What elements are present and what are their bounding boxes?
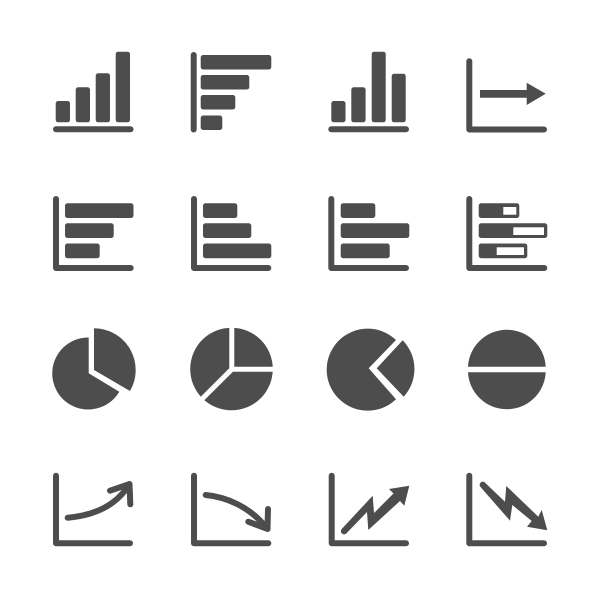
icon: falling zigzag arrow chart — [469, 476, 547, 543]
icon: horizontal bars, descending — [56, 199, 134, 268]
icon: pie chart three slices — [190, 325, 275, 410]
icon: pie chart with wedge — [327, 329, 414, 411]
icon: horizontal bars, ascending — [194, 199, 271, 268]
icon: ascending bar chart — [53, 52, 134, 132]
icon: descending horizontal bars — [191, 52, 271, 132]
icon: rising zigzag arrow chart — [332, 476, 409, 543]
icon: pie chart two halves — [468, 330, 546, 409]
icon: rising curve chart — [56, 476, 130, 543]
icon: falling curve chart — [194, 476, 268, 543]
icon: pie chart with exploded slice — [52, 328, 136, 409]
icon: flat trend arrow chart — [469, 61, 546, 129]
icon: horizontal bars, mixed — [331, 199, 409, 268]
icon: mixed bar chart — [328, 52, 409, 132]
icon: horizontal progress bars — [469, 199, 547, 268]
